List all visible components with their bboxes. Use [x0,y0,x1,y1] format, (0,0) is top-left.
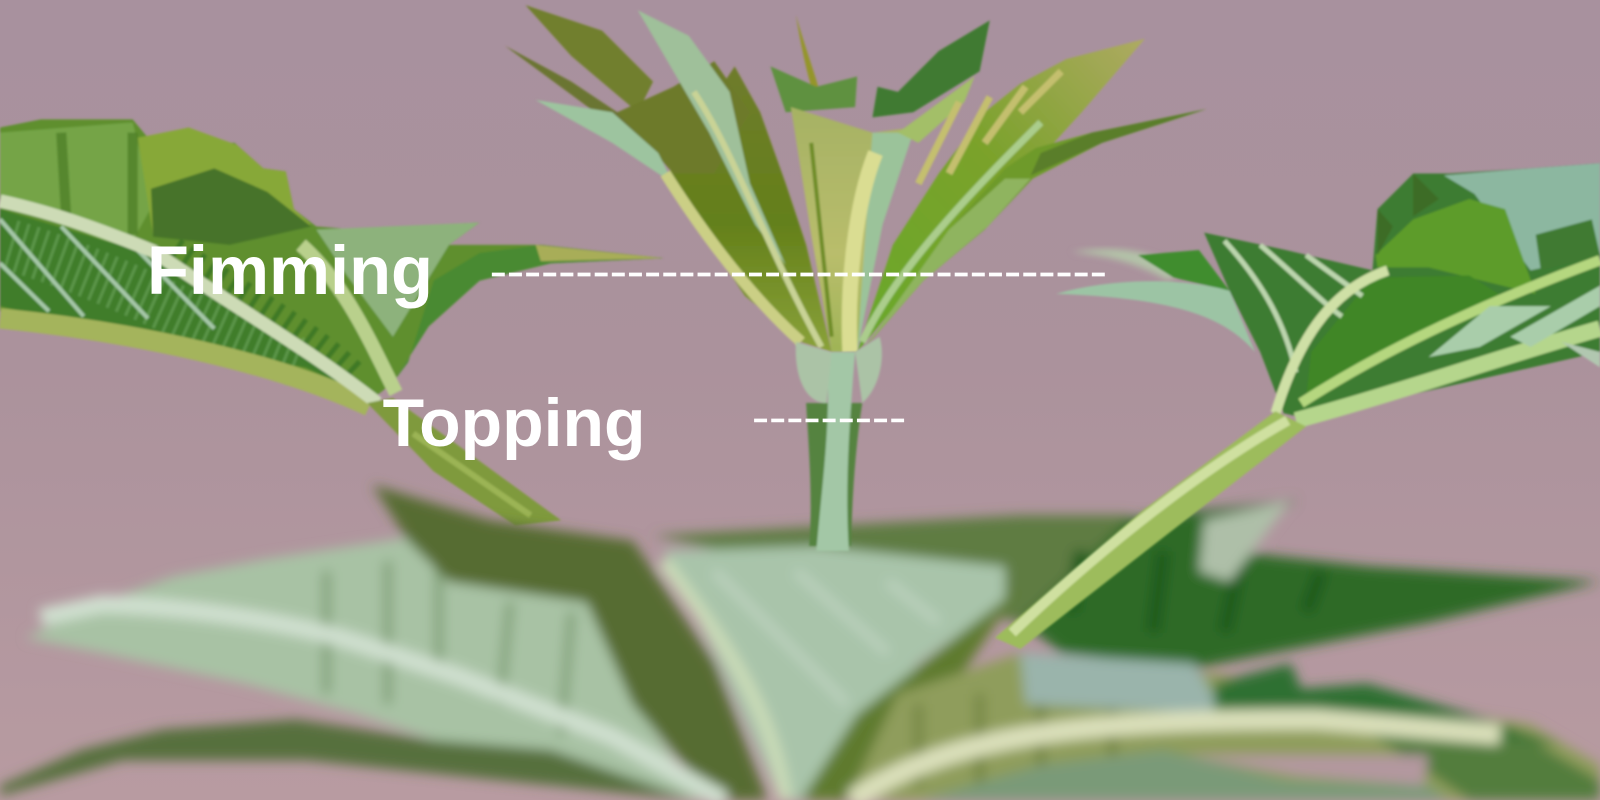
topping cut line [754,419,904,422]
label: Fimming: Fimming [147,232,433,309]
left plant leaf [0,119,663,526]
right plant leaf [995,163,1600,649]
center plant shoot [505,5,1206,352]
fimming cut line [492,273,1105,276]
label: Topping: Topping [383,385,645,461]
foreground blurred leaves [0,485,1600,800]
center stem [796,337,882,551]
